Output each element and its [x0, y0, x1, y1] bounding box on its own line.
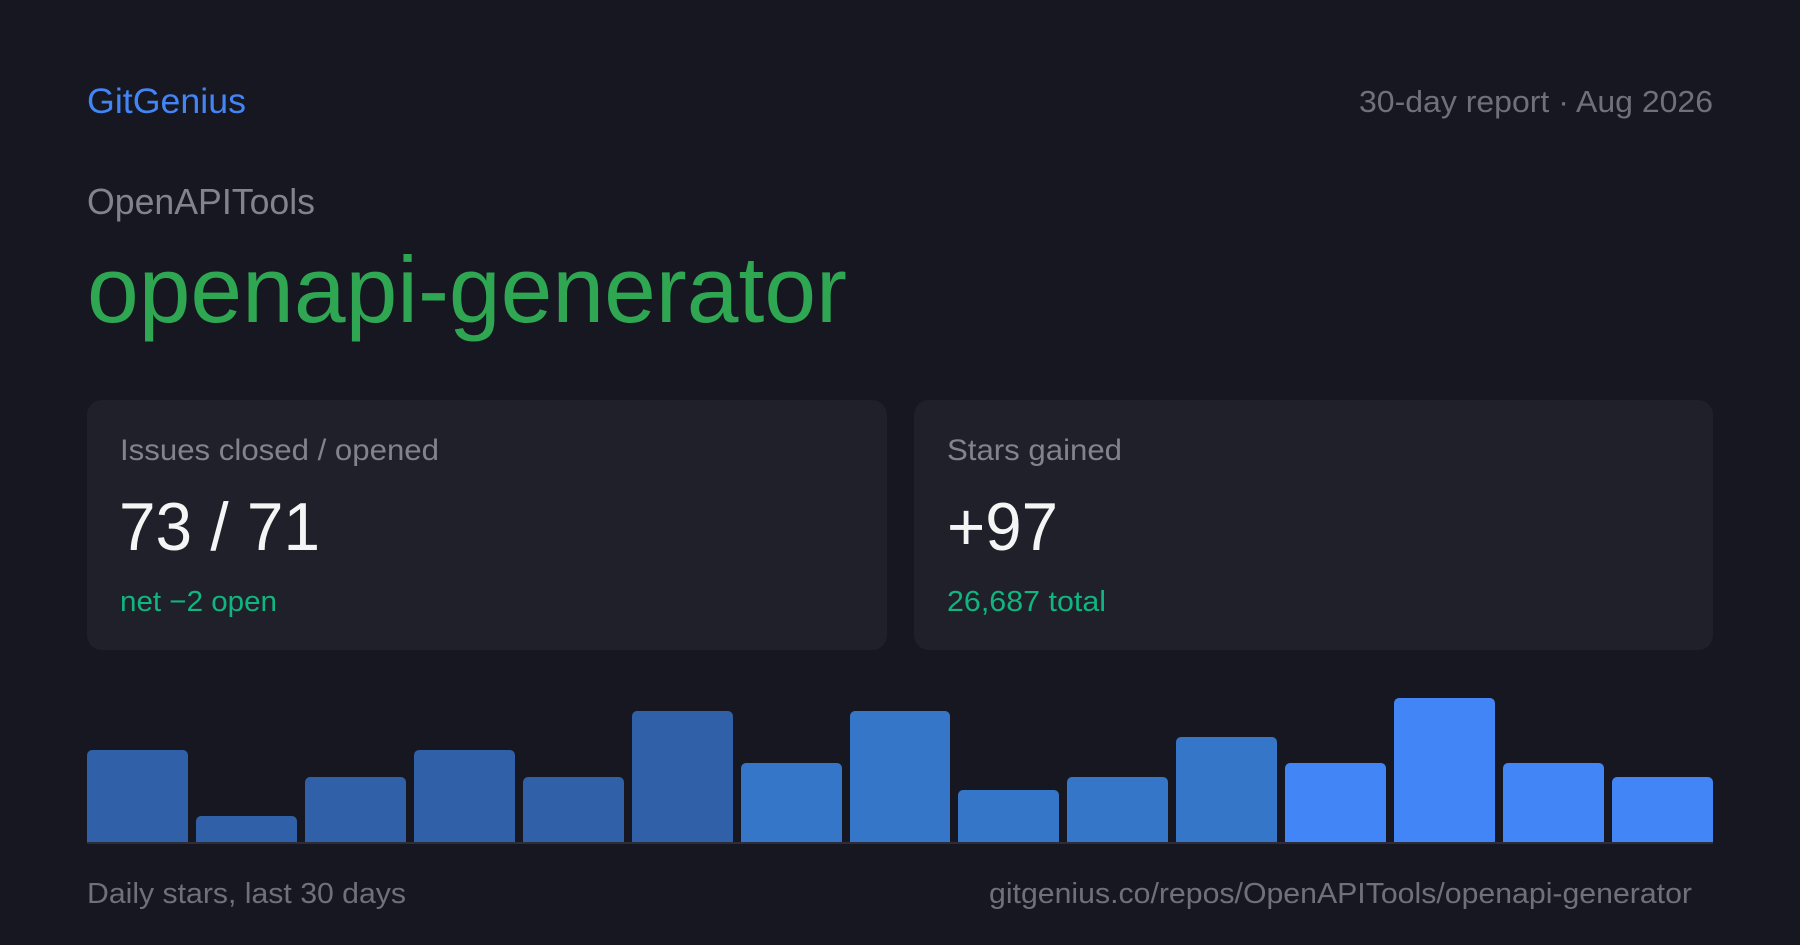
- repository owner: OpenAPITools: [87, 181, 315, 222]
- stars label: Stars gained: [947, 434, 1122, 467]
- panel: issues closed and opened: [87, 400, 887, 650]
- issues label: Issues closed / opened: [120, 434, 439, 467]
- repository title: openapi-generator: [87, 237, 847, 342]
- repository URL: gitgenius.co/repos/OpenAPITools/openapi-generator: [989, 878, 1692, 910]
- stars total: 26,687 total: [947, 586, 1106, 618]
- bar chart: daily stars: [87, 698, 1713, 844]
- stars value: +97: [947, 489, 1058, 565]
- report period: 30-day report · Aug 2026: [1359, 84, 1713, 119]
- issues net change: net −2 open: [120, 586, 277, 618]
- brand name: GitGenius: [87, 82, 246, 121]
- issues value: 73 / 71: [119, 489, 320, 565]
- panel: stars gained: [914, 400, 1713, 650]
- chart caption: Daily stars, last 30 days: [87, 878, 406, 910]
